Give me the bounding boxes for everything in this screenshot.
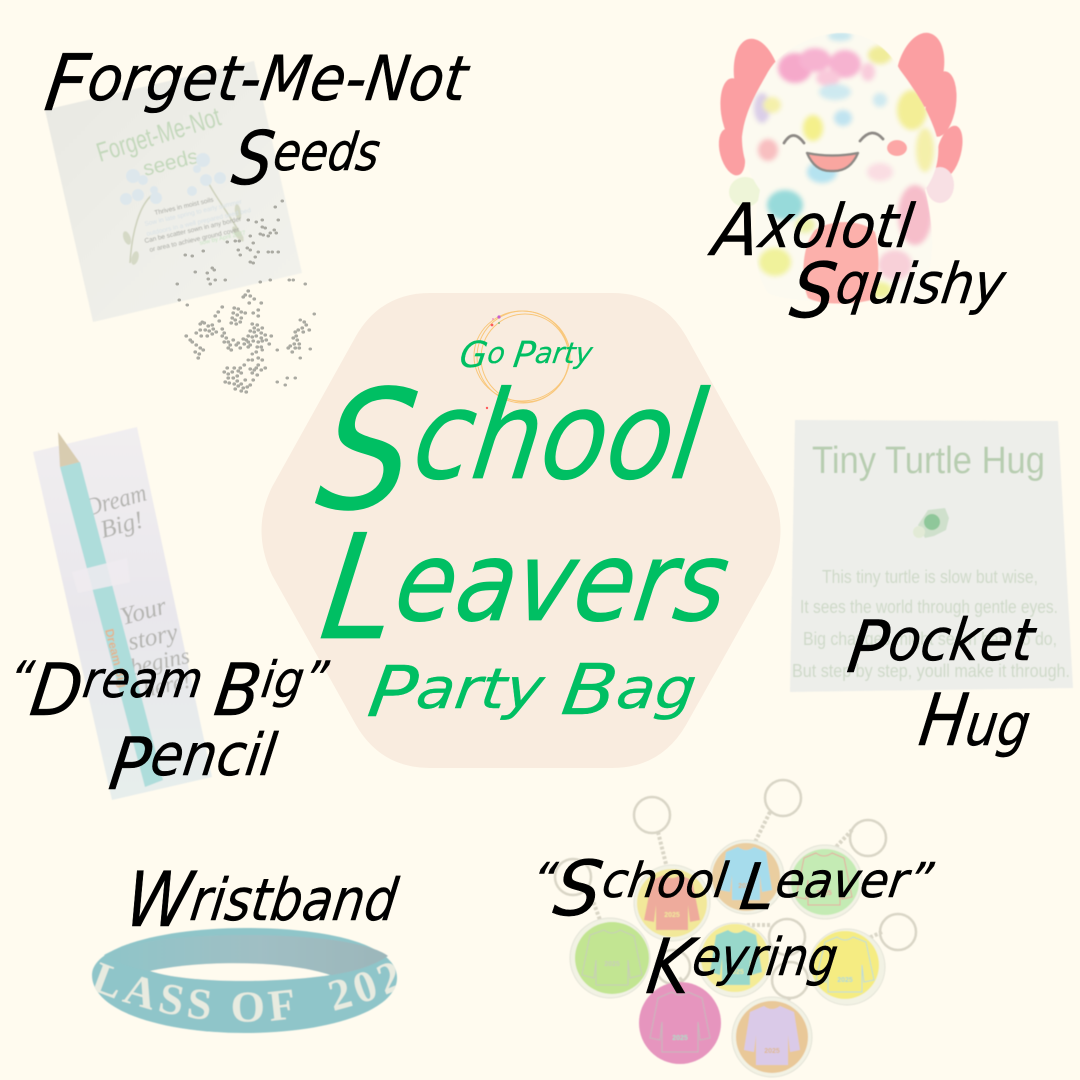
label: Axolotl Squishy: S: [785, 247, 842, 336]
label: Dream Big Pencil: P: [105, 723, 156, 807]
label: School Leaver Keyring: L: [736, 850, 781, 925]
label: Wristband: ristband: [187, 866, 402, 934]
keyring green: 2025: [604, 961, 620, 968]
subtitle: Party Bag: B: [557, 649, 623, 731]
pencil tip: [58, 432, 80, 467]
keyring yellow: [809, 929, 885, 1005]
card message top: Your: [118, 593, 170, 631]
card message top: Big!: [98, 507, 146, 544]
label: Dream Big Pencil: D: [26, 649, 88, 733]
keyring rings: [555, 780, 916, 1005]
logo: Go Party: [457, 311, 596, 409]
label: Dream Big Pencil: ream: [79, 650, 221, 709]
label: Dream Big Pencil: “: [5, 650, 39, 709]
logo wordmark: arty: [533, 336, 596, 370]
logo wordmark: o: [485, 336, 516, 370]
seed card instructions: Sow in late spring to early summer: [144, 199, 243, 228]
label: School Leaver Keyring: [525, 845, 938, 1012]
label: Forget-Me-Not Seeds: orget-Me-Not: [83, 42, 474, 115]
keyring pink: 2025: [672, 1035, 688, 1042]
keyring blue: 2025: [738, 883, 754, 890]
illustration: pocket hug card: [790, 420, 1073, 692]
keyring lilac: 2025: [764, 1048, 780, 1055]
label: Pocket Hug: P: [843, 606, 894, 690]
axolotl mouth: [807, 153, 858, 171]
keyring green two: 2025: [816, 890, 832, 897]
keyring teal: 2025: [728, 969, 744, 976]
label: School Leaver Keyring: K: [642, 923, 703, 1012]
keyring lilac: [732, 997, 812, 1077]
seed card instructions: outdoors in a well prepared seed bed: [146, 207, 252, 238]
label: School Leaver Keyring: chool: [599, 853, 746, 909]
label: School Leaver Keyring: eaver”: [772, 853, 937, 909]
card message top: story: [126, 619, 181, 656]
title: School: chool: [406, 365, 714, 507]
logo rings: [474, 311, 570, 403]
axolotl cheek: [887, 140, 907, 156]
seed card subtitle: seeds: [141, 145, 201, 181]
axolotl paint splashes: [754, 31, 934, 298]
logo wordmark: G: [457, 333, 491, 376]
pencil paper band: [72, 558, 130, 593]
logo wordmark: P: [511, 333, 538, 376]
hug card poem: This tiny turtle is slow but wise,: [822, 567, 1038, 587]
pencil card: [33, 427, 212, 800]
illustration: forget-me-not seed card: [45, 61, 302, 322]
illustration: axolotl squishy: [714, 28, 968, 304]
label: Axolotl Squishy: [705, 189, 1010, 336]
label: Forget-Me-Not Seeds: eeds: [270, 123, 384, 183]
wristband inner back: [104, 935, 388, 975]
seed card instructions: sow by April 2027: [199, 230, 247, 247]
seed card background: [45, 61, 302, 322]
label: Pocket Hug: Hug: [914, 679, 1036, 763]
label: Axolotl Squishy: A: [705, 189, 765, 273]
illustration: dream big pencil card: [33, 427, 212, 800]
wristband print: CLASS OF 2025: [94, 962, 396, 1022]
label: Dream Big Pencil: B: [210, 649, 266, 733]
label: Axolotl Squishy: xolotl: [753, 192, 918, 262]
panel: central hexagon: [262, 293, 780, 768]
wristband print: [94, 962, 396, 1022]
seed card title: Forget-Me-Not: [93, 102, 225, 168]
keyring pink: [639, 982, 721, 1064]
label: Dream Big Pencil: [2, 649, 333, 807]
seed card instructions: [144, 196, 252, 254]
label: School Leaver Keyring: “: [528, 853, 561, 909]
flowers right: [187, 153, 246, 243]
keyring green: [570, 918, 650, 998]
label: Forget-Me-Not Seeds: S: [228, 115, 280, 202]
subtitle: Party Bag: P: [363, 651, 423, 733]
label: School Leaver Keyring: eyring: [689, 928, 842, 988]
label: Dream Big Pencil: encil: [147, 721, 281, 789]
seed card instructions: or area to achieve ground cover: [149, 226, 241, 254]
seed card instructions: Thrives in moist soils: [154, 196, 215, 217]
turtle charm: [913, 508, 949, 538]
wristband outer: [92, 928, 397, 1033]
label: Axolotl Squishy: quishy: [832, 252, 1010, 317]
title: Leavers: L: [313, 505, 408, 673]
keyring coral: 2025: [664, 912, 680, 919]
keyring blue: [710, 840, 784, 914]
pencil body: [60, 462, 163, 787]
hug card title: Tiny Turtle Hug: [812, 440, 1045, 482]
title: School: S: [308, 356, 427, 548]
illustration: wristband: [91, 927, 398, 1034]
subtitle: Party Bag: arty: [412, 657, 568, 722]
subtitle: Party Bag: ag: [613, 657, 700, 722]
keyring teal: [698, 923, 772, 997]
label: Forget-Me-Not Seeds: [40, 38, 475, 202]
label: Pocket Hug: ocket: [884, 606, 1040, 674]
label: Wristband: W: [120, 856, 200, 945]
axolotl arms: [729, 177, 761, 207]
card message top: begins: [128, 643, 192, 680]
axolotl body: [742, 33, 938, 302]
label: Pocket Hug: [843, 606, 1040, 763]
keyring coral: [634, 865, 710, 941]
keyring green two: [788, 845, 862, 919]
illustration: keyrings: [555, 780, 916, 1077]
axolotl eyes: [784, 133, 883, 143]
axolotl belly: [803, 222, 878, 304]
card message top: here!: [141, 668, 193, 702]
seed card instructions: Can be scatter sown in any border: [144, 216, 243, 245]
card message top: Dream: [82, 480, 149, 522]
card message top: [82, 480, 193, 702]
logo confetti: [486, 315, 501, 409]
hug card poem: [792, 567, 1070, 681]
flowers left: [120, 169, 162, 266]
axolotl gills: [714, 28, 968, 181]
keyring yellow: 2025: [837, 977, 853, 984]
label: School Leaver Keyring: S: [549, 845, 608, 934]
title: Leavers: eavers: [388, 518, 736, 647]
label: Forget-Me-Not Seeds: F: [40, 38, 95, 129]
illustration: scattered seeds: [177, 201, 314, 392]
pencil imprint: Dream Big: [102, 627, 130, 689]
label: Dream Big Pencil: ig”: [258, 650, 332, 709]
wristband opening: [150, 963, 330, 981]
hug card: [790, 420, 1073, 692]
